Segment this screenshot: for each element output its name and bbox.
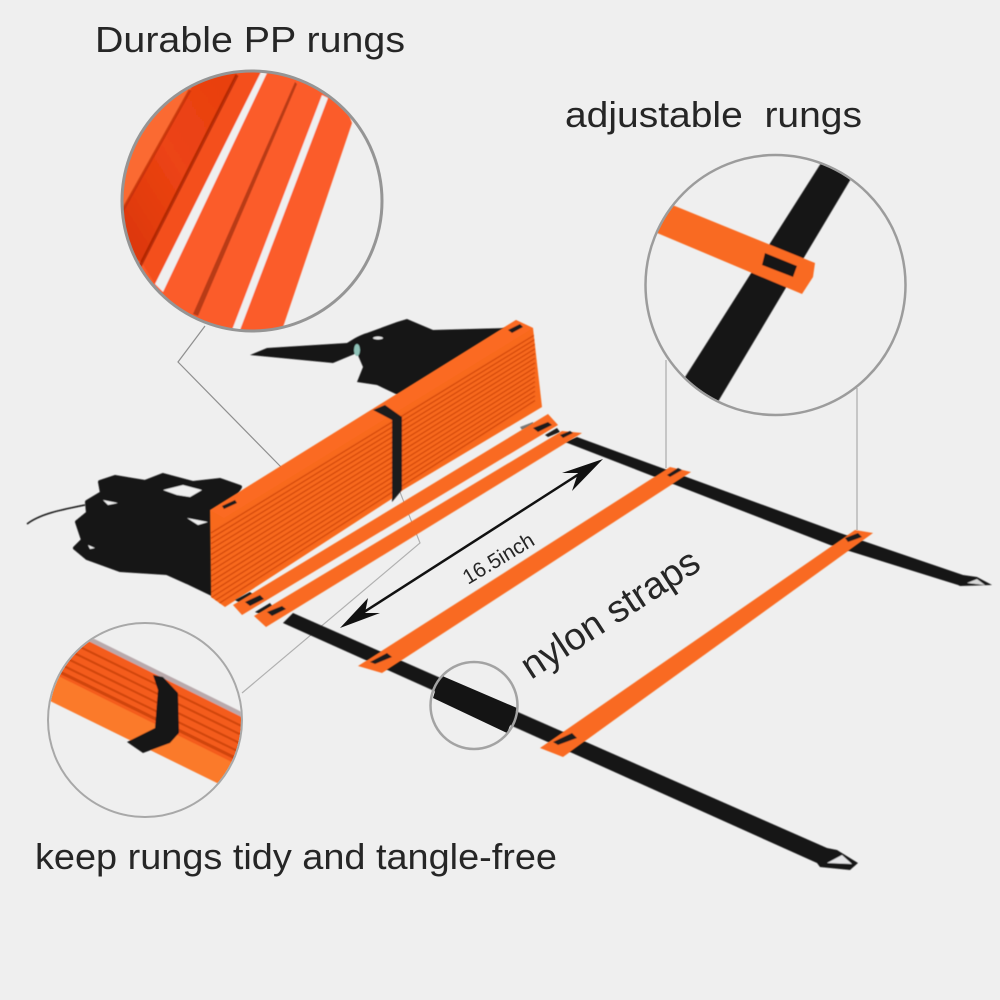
heading: Durable PP rungs: Durable PP rungs xyxy=(95,19,405,60)
icon: left strap bundle xyxy=(27,475,240,595)
folded rung stack xyxy=(210,320,542,609)
ladder right strap xyxy=(565,437,992,586)
ladder rung 4 xyxy=(540,530,873,757)
panel: nylon strap close-up xyxy=(430,662,518,749)
ladder left strap xyxy=(283,613,858,870)
panel: adjustable rung close-up xyxy=(646,155,906,415)
panel: durable rung close-up xyxy=(120,70,384,332)
strap slivers between rungs xyxy=(235,422,560,614)
panel: tidy strap close-up xyxy=(47,622,243,818)
icon: back strap bundle xyxy=(250,319,525,396)
ladder rung 3 xyxy=(358,467,691,673)
label: nylon straps: nylon straps xyxy=(513,541,708,688)
label: 16.5inch: 16.5inch xyxy=(459,529,539,589)
loose rung 2 xyxy=(254,431,582,627)
loose rung 1 xyxy=(233,414,558,615)
arrow: 16.5 inch spacing xyxy=(340,459,603,628)
heading: keep rungs tidy and tangle-free: keep rungs tidy and tangle-free xyxy=(35,836,557,877)
heading: adjustable rungs: adjustable rungs xyxy=(565,94,862,135)
leader lines xyxy=(178,326,857,693)
